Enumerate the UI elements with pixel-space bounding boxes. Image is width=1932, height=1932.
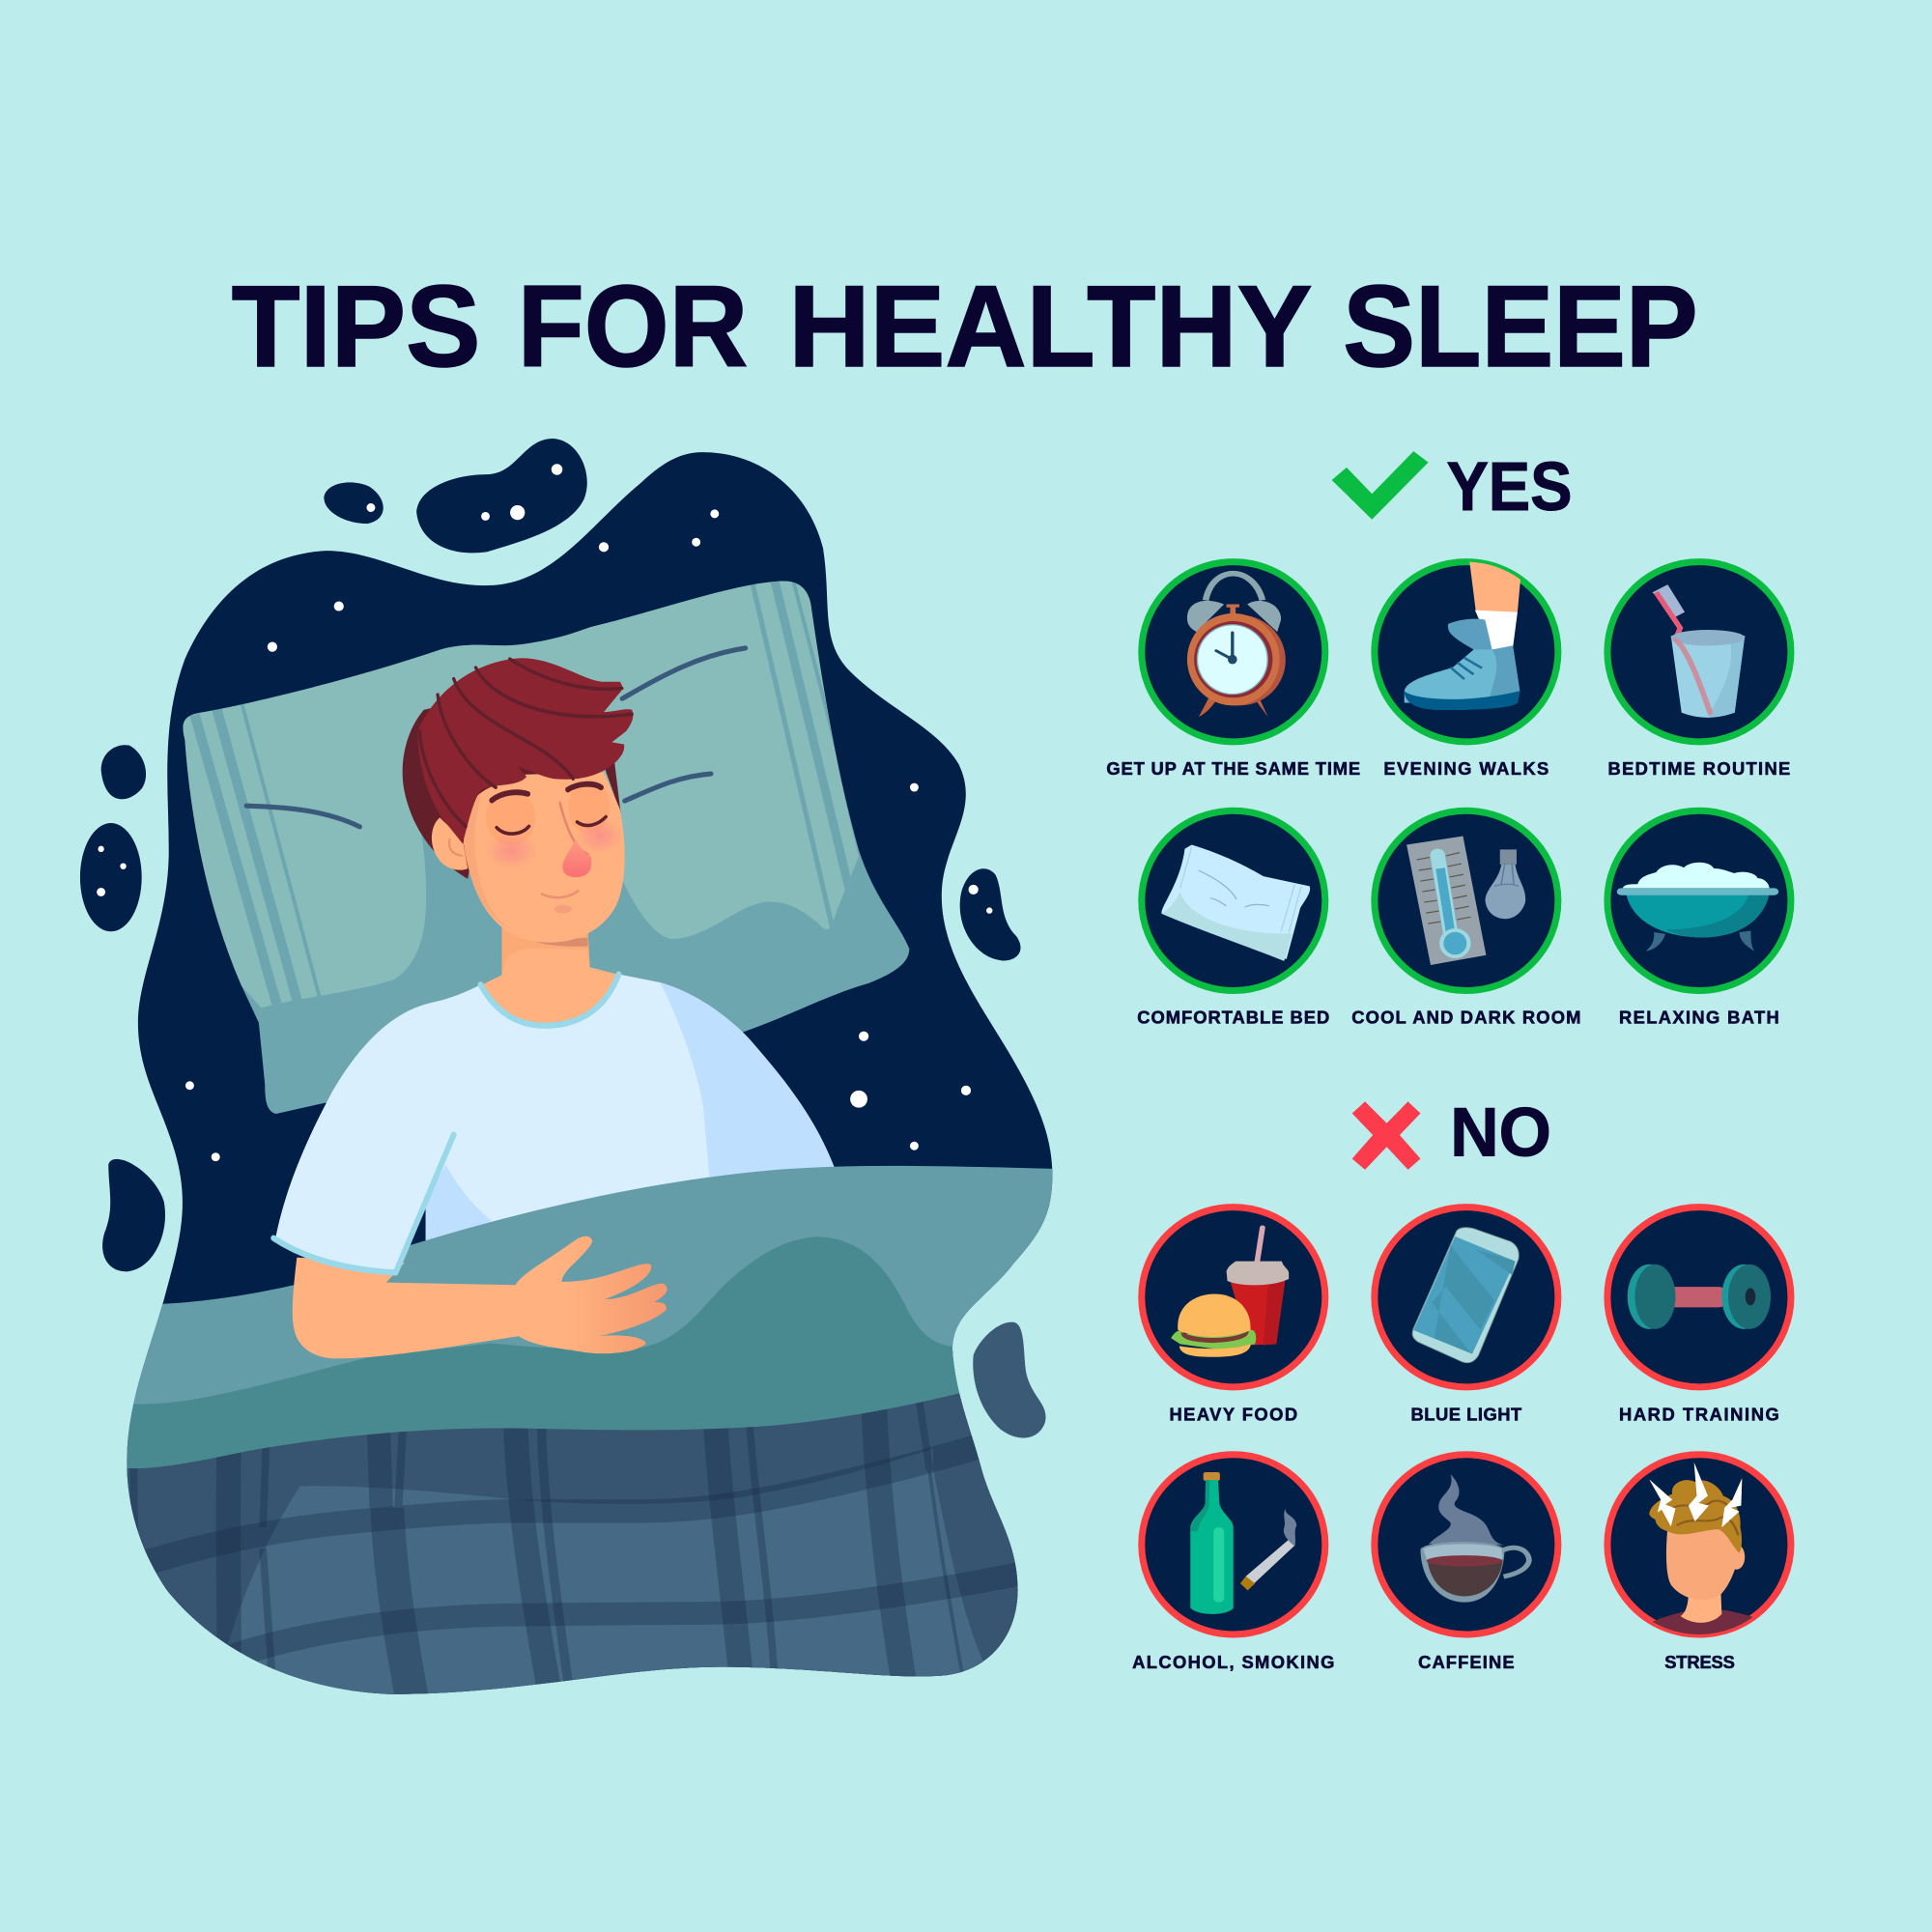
title xyxy=(232,262,1698,391)
icon: pillow xyxy=(1161,844,1310,961)
tile: hard training xyxy=(1607,1208,1791,1425)
icon: coffee cup with steam xyxy=(1420,1474,1529,1603)
tile: heavy food xyxy=(1142,1208,1325,1425)
icon: smartphone xyxy=(1412,1228,1519,1363)
label: HARD TRAINING xyxy=(1619,1405,1779,1425)
label: STRESS xyxy=(1664,1652,1735,1672)
neck shadow xyxy=(536,938,588,947)
infographic canvas xyxy=(79,284,1795,1694)
title: TIPS xyxy=(232,262,480,391)
tile: evening walks xyxy=(1375,561,1558,779)
NO heading xyxy=(1352,1094,1551,1171)
t-shirt xyxy=(275,974,835,1318)
icon: walking shoe xyxy=(1405,561,1522,710)
label: COOL AND DARK ROOM xyxy=(1351,1007,1580,1027)
label: BEDTIME ROUTINE xyxy=(1608,758,1790,779)
NO text: NO xyxy=(1450,1094,1551,1171)
title: SLEEP xyxy=(1343,262,1698,391)
label: BLUE LIGHT xyxy=(1410,1405,1522,1425)
title: HEALTHY xyxy=(788,262,1312,391)
label: HEAVY FOOD xyxy=(1169,1405,1297,1425)
hair back xyxy=(403,705,621,879)
tile: cool and dark room xyxy=(1351,810,1580,1027)
sleeping man: torso and head xyxy=(275,658,835,1318)
blanket dark fold xyxy=(128,1236,999,1515)
label: COMFORTABLE BED xyxy=(1137,1007,1329,1027)
face xyxy=(464,773,625,943)
ear xyxy=(432,817,468,870)
label: GET UP AT THE SAME TIME xyxy=(1106,758,1360,779)
label: RELAXING BATH xyxy=(1619,1007,1779,1027)
tile: blue light xyxy=(1375,1208,1558,1425)
night sky blob with stars xyxy=(127,452,1052,1694)
tile: relaxing bath xyxy=(1607,810,1791,1027)
hair xyxy=(417,658,633,843)
icon: check mark xyxy=(1332,451,1429,520)
YES heading xyxy=(1332,448,1573,526)
floating blobs xyxy=(80,439,1046,1437)
icon: bottle and cigarette xyxy=(1190,1472,1296,1614)
tile: comfortable bed xyxy=(1137,810,1329,1027)
YES text: YES xyxy=(1446,448,1573,526)
blanket xyxy=(128,1165,1053,1694)
neck xyxy=(480,922,620,1027)
tile: stress xyxy=(1607,1455,1791,1672)
label: CAFFEINE xyxy=(1418,1652,1515,1672)
man's arm and hand xyxy=(293,1236,668,1358)
icon: thermometer and bulb xyxy=(1406,837,1525,965)
icon: stressed head xyxy=(1649,1463,1755,1641)
icon: dumbbell xyxy=(1628,1264,1771,1329)
shirt sleeve xyxy=(273,1090,454,1272)
tile: alcohol, smoking xyxy=(1132,1455,1334,1672)
icon: red cross xyxy=(1352,1101,1420,1170)
tile: get up at the same time xyxy=(1106,562,1360,779)
icon: bathtub with foam xyxy=(1617,863,1778,952)
icon: burger and drink xyxy=(1171,1228,1289,1357)
pillow xyxy=(183,577,909,1114)
icon: alarm clock xyxy=(1187,574,1286,717)
blanket light fold xyxy=(128,1165,1053,1453)
tile: caffeine xyxy=(1375,1455,1558,1672)
facial features xyxy=(449,784,606,914)
label: EVENING WALKS xyxy=(1383,758,1548,779)
title: FOR xyxy=(518,262,748,391)
plaid duvet xyxy=(128,1393,1018,1694)
tile: bedtime routine xyxy=(1607,562,1791,779)
icon: toothbrush in glass xyxy=(1653,584,1745,718)
label: ALCOHOL, SMOKING xyxy=(1132,1652,1334,1672)
